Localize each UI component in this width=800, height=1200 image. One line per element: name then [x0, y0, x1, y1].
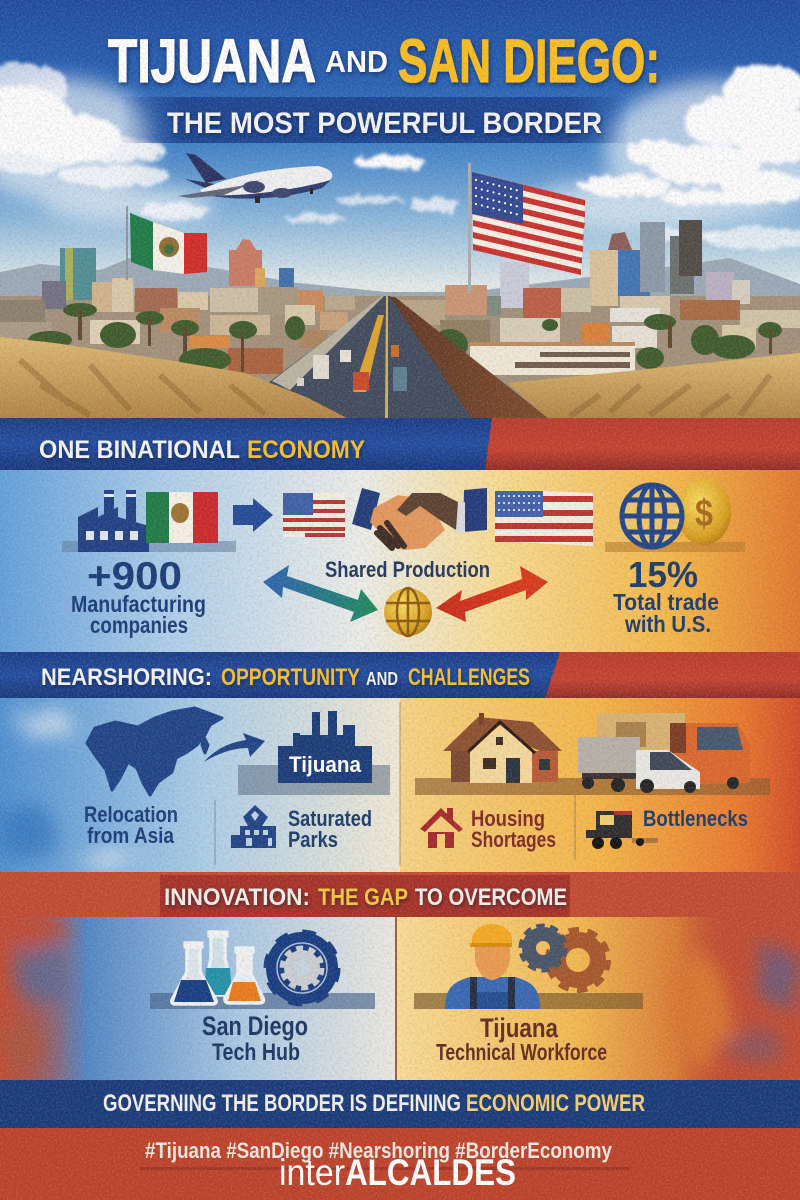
icon: Tijuana factory: Tijuana — [289, 752, 362, 777]
arrow: curved to Tijuana — [204, 733, 265, 762]
icon: handshake — [352, 488, 487, 550]
Tijuana skyline — [0, 239, 355, 374]
sky — [0, 0, 800, 420]
clouds — [0, 63, 800, 250]
label: relocation from Asia — [84, 802, 178, 848]
panel: one binational economy — [0, 418, 800, 652]
section header: OPPORTUNITY — [221, 664, 360, 691]
icon: Tijuana factory — [238, 711, 390, 795]
arrow: red double — [436, 566, 548, 622]
icon: gold globe — [384, 588, 432, 636]
flag: United States — [468, 163, 585, 293]
title: AND — [325, 44, 388, 79]
label: Tijuana technical workforce — [436, 1013, 607, 1065]
label: Tijuana technical workforce: Technical Workforce — [436, 1039, 607, 1065]
panel: hero scene — [0, 0, 800, 420]
label: relocation from Asia: from Asia — [87, 823, 175, 848]
city base — [0, 296, 800, 420]
section header: NEARSHORING: — [41, 664, 212, 691]
section header: THE GAP — [318, 884, 408, 911]
icon: housing shortages — [420, 808, 463, 848]
section header: TO OVERCOME — [415, 884, 567, 911]
section header — [160, 875, 570, 917]
icon: worker — [445, 924, 540, 1009]
banner: closing statement: ECONOMIC POWER — [466, 1090, 645, 1117]
watercolor smears — [0, 715, 150, 866]
soft cloud haze — [0, 78, 800, 230]
stat: 15% total trade: Total trade — [613, 589, 719, 615]
border fence — [390, 297, 548, 418]
label: housing shortages — [471, 806, 556, 852]
left panel background — [0, 917, 395, 1080]
label: saturated parks: Parks — [288, 827, 338, 852]
right panel background — [397, 917, 727, 1080]
section background right — [400, 697, 800, 872]
icon: large US flag — [495, 491, 593, 546]
label: Tijuana technical workforce: Tijuana — [480, 1013, 559, 1043]
icon: Asia map — [87, 708, 222, 795]
stat: +900 manufacturing companies: Manufacturing — [71, 591, 206, 617]
section header: ONE BINATIONAL — [39, 436, 240, 464]
footer — [0, 1128, 800, 1200]
section header: AND — [366, 669, 398, 689]
desert hills — [0, 337, 800, 418]
San Diego skyline — [400, 220, 800, 348]
icon: trucks — [578, 713, 750, 793]
banner: closing statement: GOVERNING THE BORDER IS DEFINING — [103, 1090, 461, 1117]
section header: ECONOMY — [247, 436, 365, 464]
icon: house — [443, 713, 562, 783]
icon: blue gear — [268, 934, 336, 1002]
section background — [0, 470, 800, 652]
white building — [470, 342, 635, 375]
label: San Diego tech hub: Tech Hub — [212, 1039, 300, 1066]
section header — [0, 418, 800, 470]
arrow — [233, 498, 273, 532]
logo: interALCALDES — [279, 1152, 516, 1193]
label: saturated parks — [288, 806, 372, 852]
label: housing shortages: Housing — [471, 806, 545, 831]
hashtags: #Tijuana #SanDiego #Nearshoring #BorderEconomy — [145, 1138, 613, 1163]
stat: +900 manufacturing companies: companies — [90, 612, 188, 638]
panel: innovation — [0, 872, 800, 1080]
label: saturated parks: Saturated — [288, 806, 372, 831]
section header — [0, 652, 800, 698]
icon: bottleneck truck — [586, 811, 658, 849]
label: relocation from Asia: Relocation — [84, 802, 178, 827]
section header: INNOVATION: — [164, 884, 310, 911]
icon: flasks — [172, 932, 264, 1004]
section header: CHALLENGES — [408, 664, 530, 691]
title: TIJUANA — [108, 27, 316, 95]
stat: +900 manufacturing companies: +900 — [87, 555, 182, 598]
icon: gears — [522, 927, 607, 989]
icon: small US flag — [283, 493, 345, 537]
paint blotches — [0, 914, 800, 1069]
icon: factory with Mexican flag — [62, 490, 236, 552]
subtitle band — [120, 97, 630, 143]
logo: interALCALDES: inter — [279, 1152, 345, 1193]
icon: globe and coin: $ — [695, 493, 713, 535]
title — [108, 27, 660, 95]
label: San Diego tech hub — [202, 1011, 308, 1066]
banner: closing statement — [0, 1080, 800, 1128]
icon strip — [150, 993, 375, 1009]
icon strip — [414, 993, 643, 1009]
section background — [0, 872, 800, 1080]
road — [268, 296, 480, 420]
icon: saturated parks — [231, 805, 276, 848]
title: SAN DIEGO: — [398, 27, 660, 95]
airplane — [178, 153, 332, 203]
logo: interALCALDES: ALCALDES — [345, 1152, 516, 1193]
arrow: blue green double — [263, 565, 378, 622]
stat: 15% total trade — [613, 554, 719, 637]
trees — [28, 303, 782, 372]
stat: 15% total trade: with U.S. — [624, 611, 711, 637]
subtitle band: THE MOST POWERFUL BORDER — [167, 107, 602, 140]
label: housing shortages: Shortages — [471, 827, 556, 852]
section background left — [0, 697, 400, 872]
mountains — [0, 258, 800, 315]
flag: Mexico — [126, 206, 207, 280]
label: shared production: Shared Production — [325, 557, 490, 582]
label: bottlenecks: Bottlenecks — [643, 806, 748, 831]
label: San Diego tech hub: San Diego — [202, 1011, 308, 1041]
stat: 15% total trade: 15% — [628, 554, 698, 595]
icon: globe and coin — [605, 479, 745, 552]
stat: +900 manufacturing companies — [71, 555, 206, 638]
ground strip — [415, 778, 770, 795]
panel: nearshoring — [0, 652, 800, 872]
